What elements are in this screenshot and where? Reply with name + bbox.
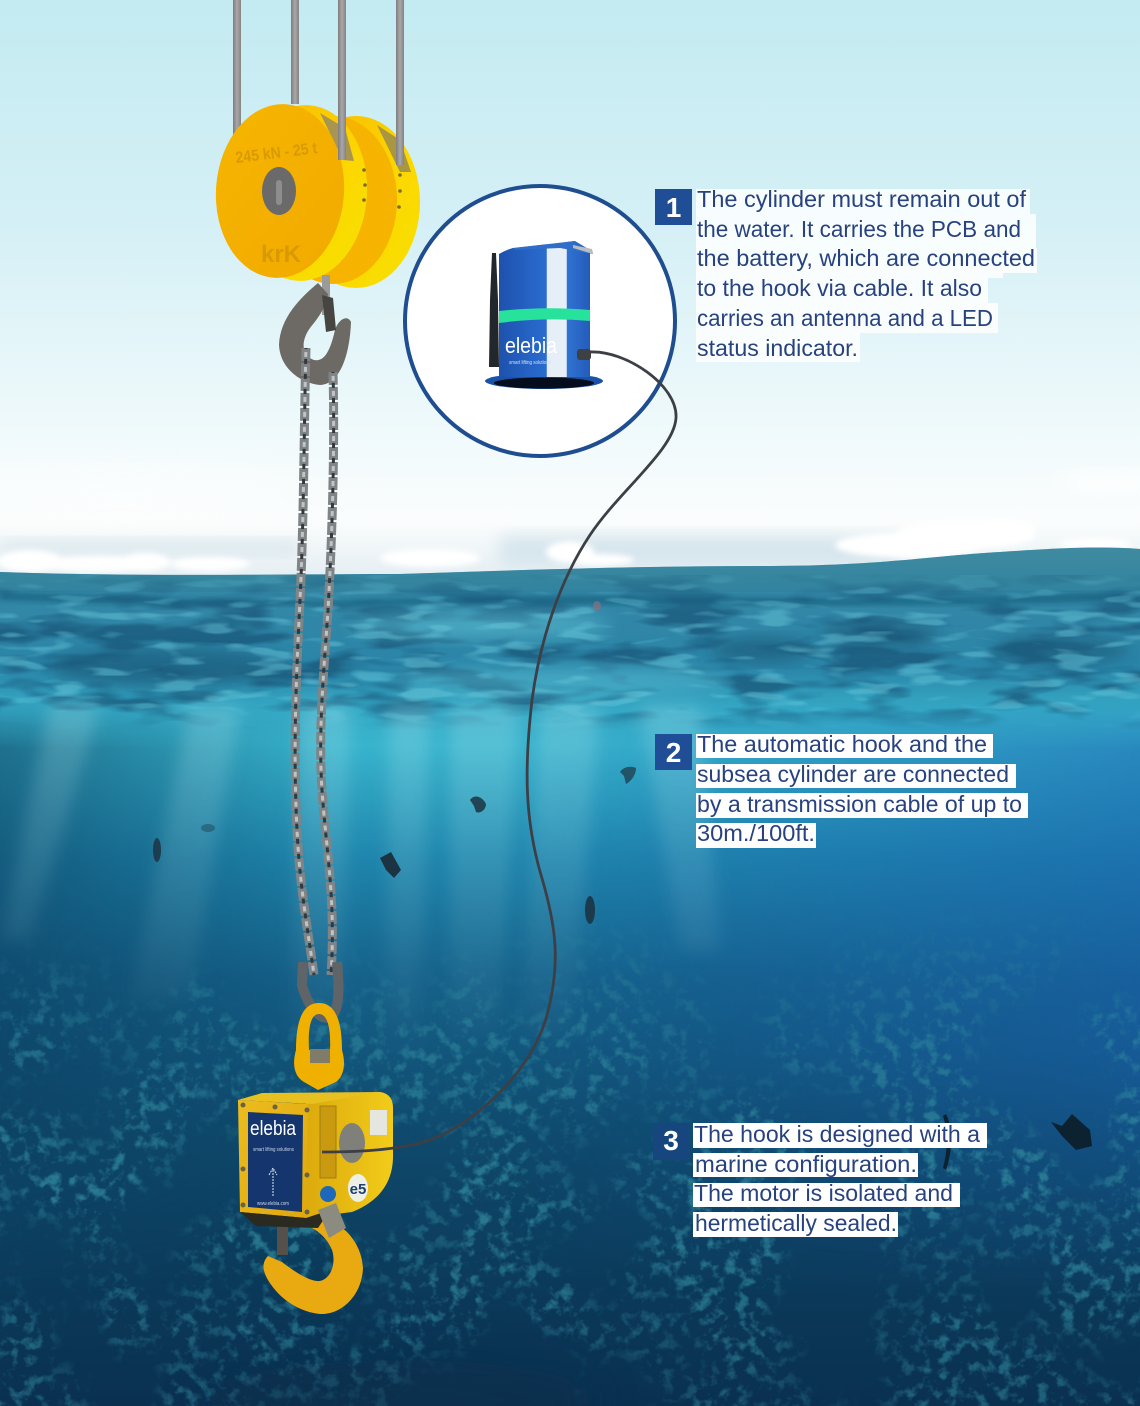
swivel ring bbox=[294, 1003, 344, 1090]
light rays below surface bbox=[0, 705, 720, 1050]
callout 3 bbox=[653, 1121, 987, 1237]
transmission cable bbox=[322, 352, 676, 1152]
callout 1: status indicator. bbox=[697, 335, 858, 361]
logo on cylinder: elebia bbox=[505, 333, 558, 358]
callout 2: The automatic hook and the bbox=[697, 731, 987, 757]
connector slot bbox=[320, 1106, 336, 1178]
callout 1: to the hook via cable. It also bbox=[697, 275, 982, 301]
load rating: 245 kN - 25 t bbox=[235, 140, 319, 167]
cylinder body: smart lifting solutions bbox=[509, 360, 551, 366]
steel ropes behind block bbox=[233, 0, 299, 136]
background: sky bbox=[0, 0, 1140, 580]
coral reef bbox=[0, 955, 1140, 1406]
callout 3: 3 bbox=[663, 1125, 679, 1156]
callout 2: 2 bbox=[666, 737, 681, 768]
lower hook bbox=[264, 1220, 363, 1314]
callout 3: The hook is designed with a bbox=[694, 1121, 980, 1147]
maker logo: krK bbox=[261, 241, 302, 268]
callout 2: subsea cylinder are connected bbox=[697, 761, 1009, 787]
badge: e5: e5 bbox=[350, 1181, 366, 1198]
label plate bbox=[370, 1110, 387, 1135]
latch bbox=[318, 1203, 346, 1238]
callout 1: the battery, which are connected bbox=[697, 245, 1035, 271]
callout 3: marine configuration. bbox=[695, 1151, 917, 1177]
brand panel bbox=[248, 1112, 303, 1212]
callout 2 bbox=[655, 731, 1028, 848]
rivets bbox=[240, 1102, 310, 1214]
callout 1 bbox=[655, 186, 1037, 362]
callout 2: 30m./100ft. bbox=[697, 820, 815, 846]
inset circle with cylinder bbox=[405, 186, 675, 456]
brand panel: www.elebia.com bbox=[257, 1201, 289, 1207]
callout 1: 1 bbox=[666, 192, 681, 223]
callout 2: by a transmission cable of up to bbox=[697, 791, 1022, 817]
callout 1: carries an antenna and a LED bbox=[697, 305, 993, 331]
callout 1: The cylinder must remain out of bbox=[697, 186, 1027, 212]
rear sheave bbox=[292, 116, 420, 288]
front disc bbox=[210, 100, 350, 282]
brand panel: elebia bbox=[250, 1118, 297, 1140]
badge: e5 bbox=[348, 1174, 368, 1202]
background: sea and underwater gradient bbox=[0, 548, 1140, 1302]
hook body bbox=[306, 1092, 393, 1218]
automatic underwater hook bbox=[238, 962, 393, 1314]
callout 1: the water. It carries the PCB and bbox=[697, 216, 1021, 242]
cylinder body bbox=[485, 241, 603, 389]
badge: blue bbox=[320, 1186, 336, 1202]
callout 3: The motor is isolated and bbox=[694, 1180, 953, 1206]
pulley block bbox=[210, 0, 420, 288]
grey port bbox=[339, 1123, 365, 1163]
shackle bbox=[302, 962, 338, 1018]
brand panel: smart lifting solutions bbox=[253, 1147, 294, 1153]
fish bbox=[153, 601, 1092, 1170]
middle rim bbox=[233, 101, 373, 285]
wave surface texture bbox=[0, 548, 1140, 730]
callout 3: hermetically sealed. bbox=[695, 1210, 897, 1236]
upper hook bbox=[279, 275, 351, 385]
chains bbox=[295, 348, 334, 975]
icon: antenna bbox=[489, 253, 499, 367]
axle bbox=[262, 167, 296, 215]
clouds on the horizon bbox=[0, 520, 1131, 572]
LED status band bbox=[499, 308, 590, 323]
